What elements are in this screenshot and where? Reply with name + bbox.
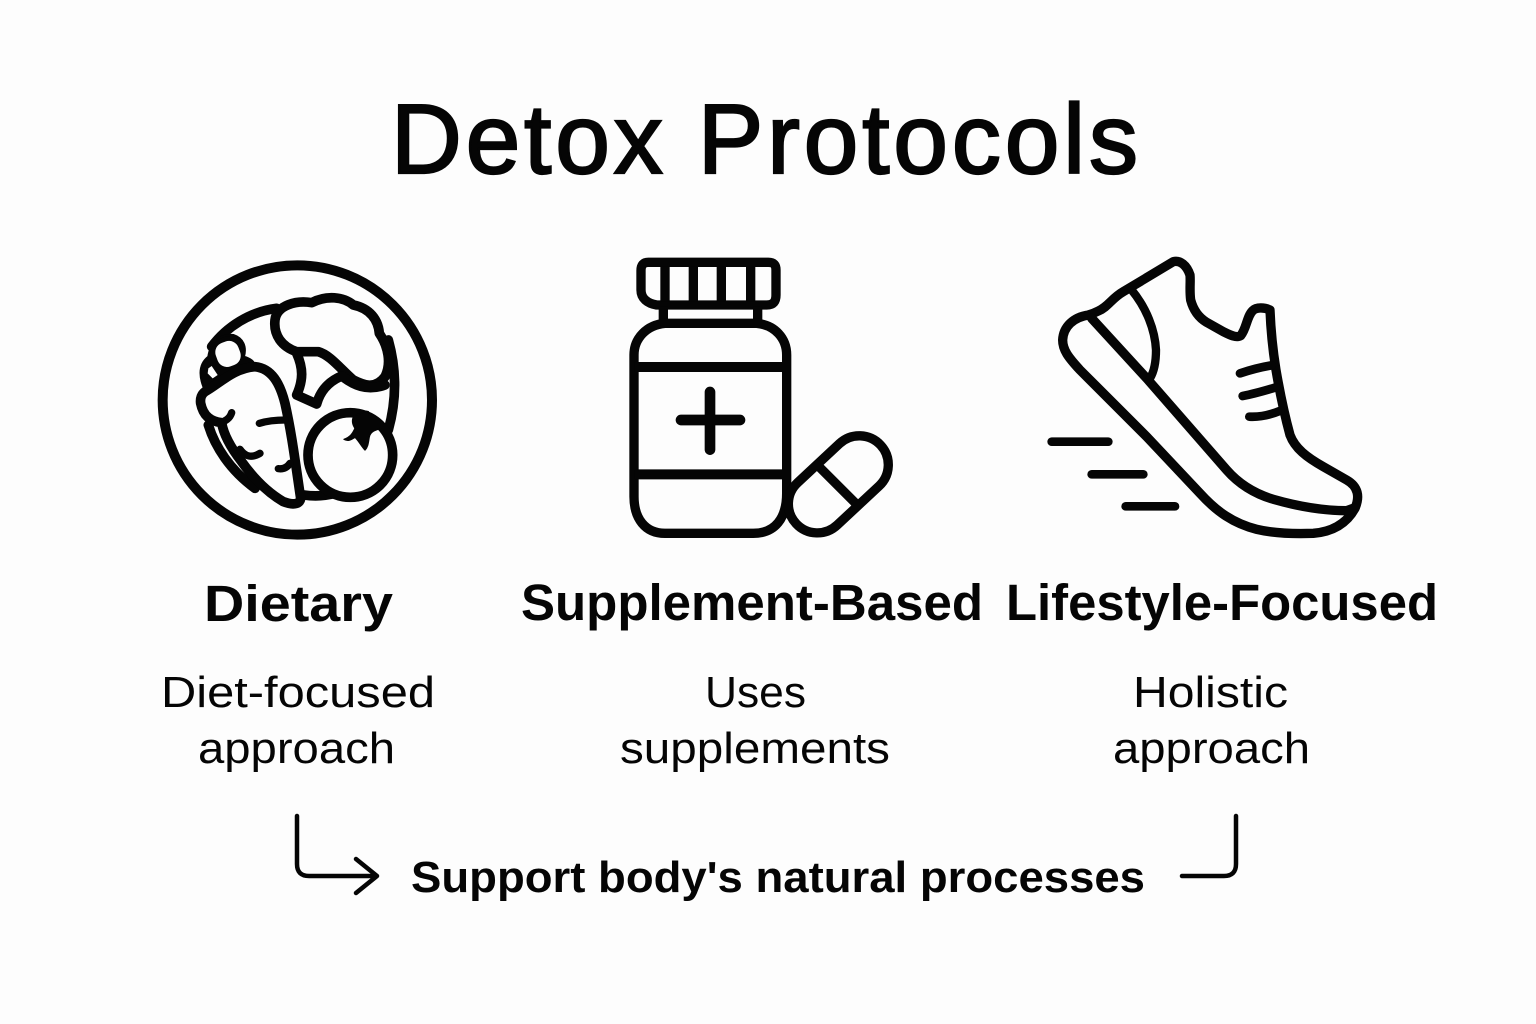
label bands xyxy=(635,367,785,474)
heading: supplement-based: Supplement-Based xyxy=(521,574,983,631)
broccoli stem xyxy=(297,353,385,404)
heel curve xyxy=(1132,290,1156,378)
title: Detox Protocols xyxy=(391,84,1138,194)
inner plate edge xyxy=(208,308,395,496)
carrot xyxy=(201,367,301,504)
speed lines xyxy=(1052,442,1175,506)
description: supplement-based xyxy=(620,668,890,773)
plate rim xyxy=(163,265,432,535)
sole line xyxy=(1092,318,1355,511)
description: supplement-based: Uses xyxy=(705,668,806,717)
description: supplement-based: supplements xyxy=(620,724,890,773)
bottle neck xyxy=(663,307,758,322)
description: lifestyle-focused: approach xyxy=(1113,724,1310,773)
cap ridges xyxy=(665,267,751,302)
description: lifestyle-focused xyxy=(1113,668,1310,773)
heading: lifestyle-focused: Lifestyle-Focused xyxy=(1006,574,1438,631)
description: dietary: approach xyxy=(198,724,395,773)
panel: lifestyle-focused xyxy=(1006,261,1438,773)
heading: dietary: Dietary xyxy=(204,575,394,632)
carrot markings xyxy=(220,413,290,469)
capsule divider xyxy=(817,465,857,505)
leaf gap xyxy=(208,366,218,378)
carrot top leaves xyxy=(201,335,255,393)
tomato xyxy=(308,413,393,497)
leaf highlight xyxy=(212,338,244,370)
plus sign xyxy=(681,392,740,450)
arrow: left bracket into summary xyxy=(297,816,377,893)
bottle cap xyxy=(641,262,776,305)
icon: running shoe xyxy=(1052,261,1358,534)
summary text: Support body's natural processes xyxy=(411,853,1145,902)
panel: supplement-based xyxy=(521,262,983,773)
shoe outline xyxy=(1063,261,1358,534)
panel: dietary xyxy=(161,265,435,773)
icon: supplement bottle and capsule xyxy=(634,262,900,545)
description: dietary: Diet-focused xyxy=(161,668,435,717)
description: dietary xyxy=(161,668,435,773)
icon: plate of vegetables xyxy=(163,265,432,535)
broccoli xyxy=(275,298,389,385)
tomato stem xyxy=(344,411,381,450)
capsule xyxy=(776,424,900,545)
laces xyxy=(1240,365,1281,417)
arrow: right bracket xyxy=(1182,816,1236,876)
bottle body xyxy=(634,323,787,533)
description: lifestyle-focused: Holistic xyxy=(1133,668,1288,717)
